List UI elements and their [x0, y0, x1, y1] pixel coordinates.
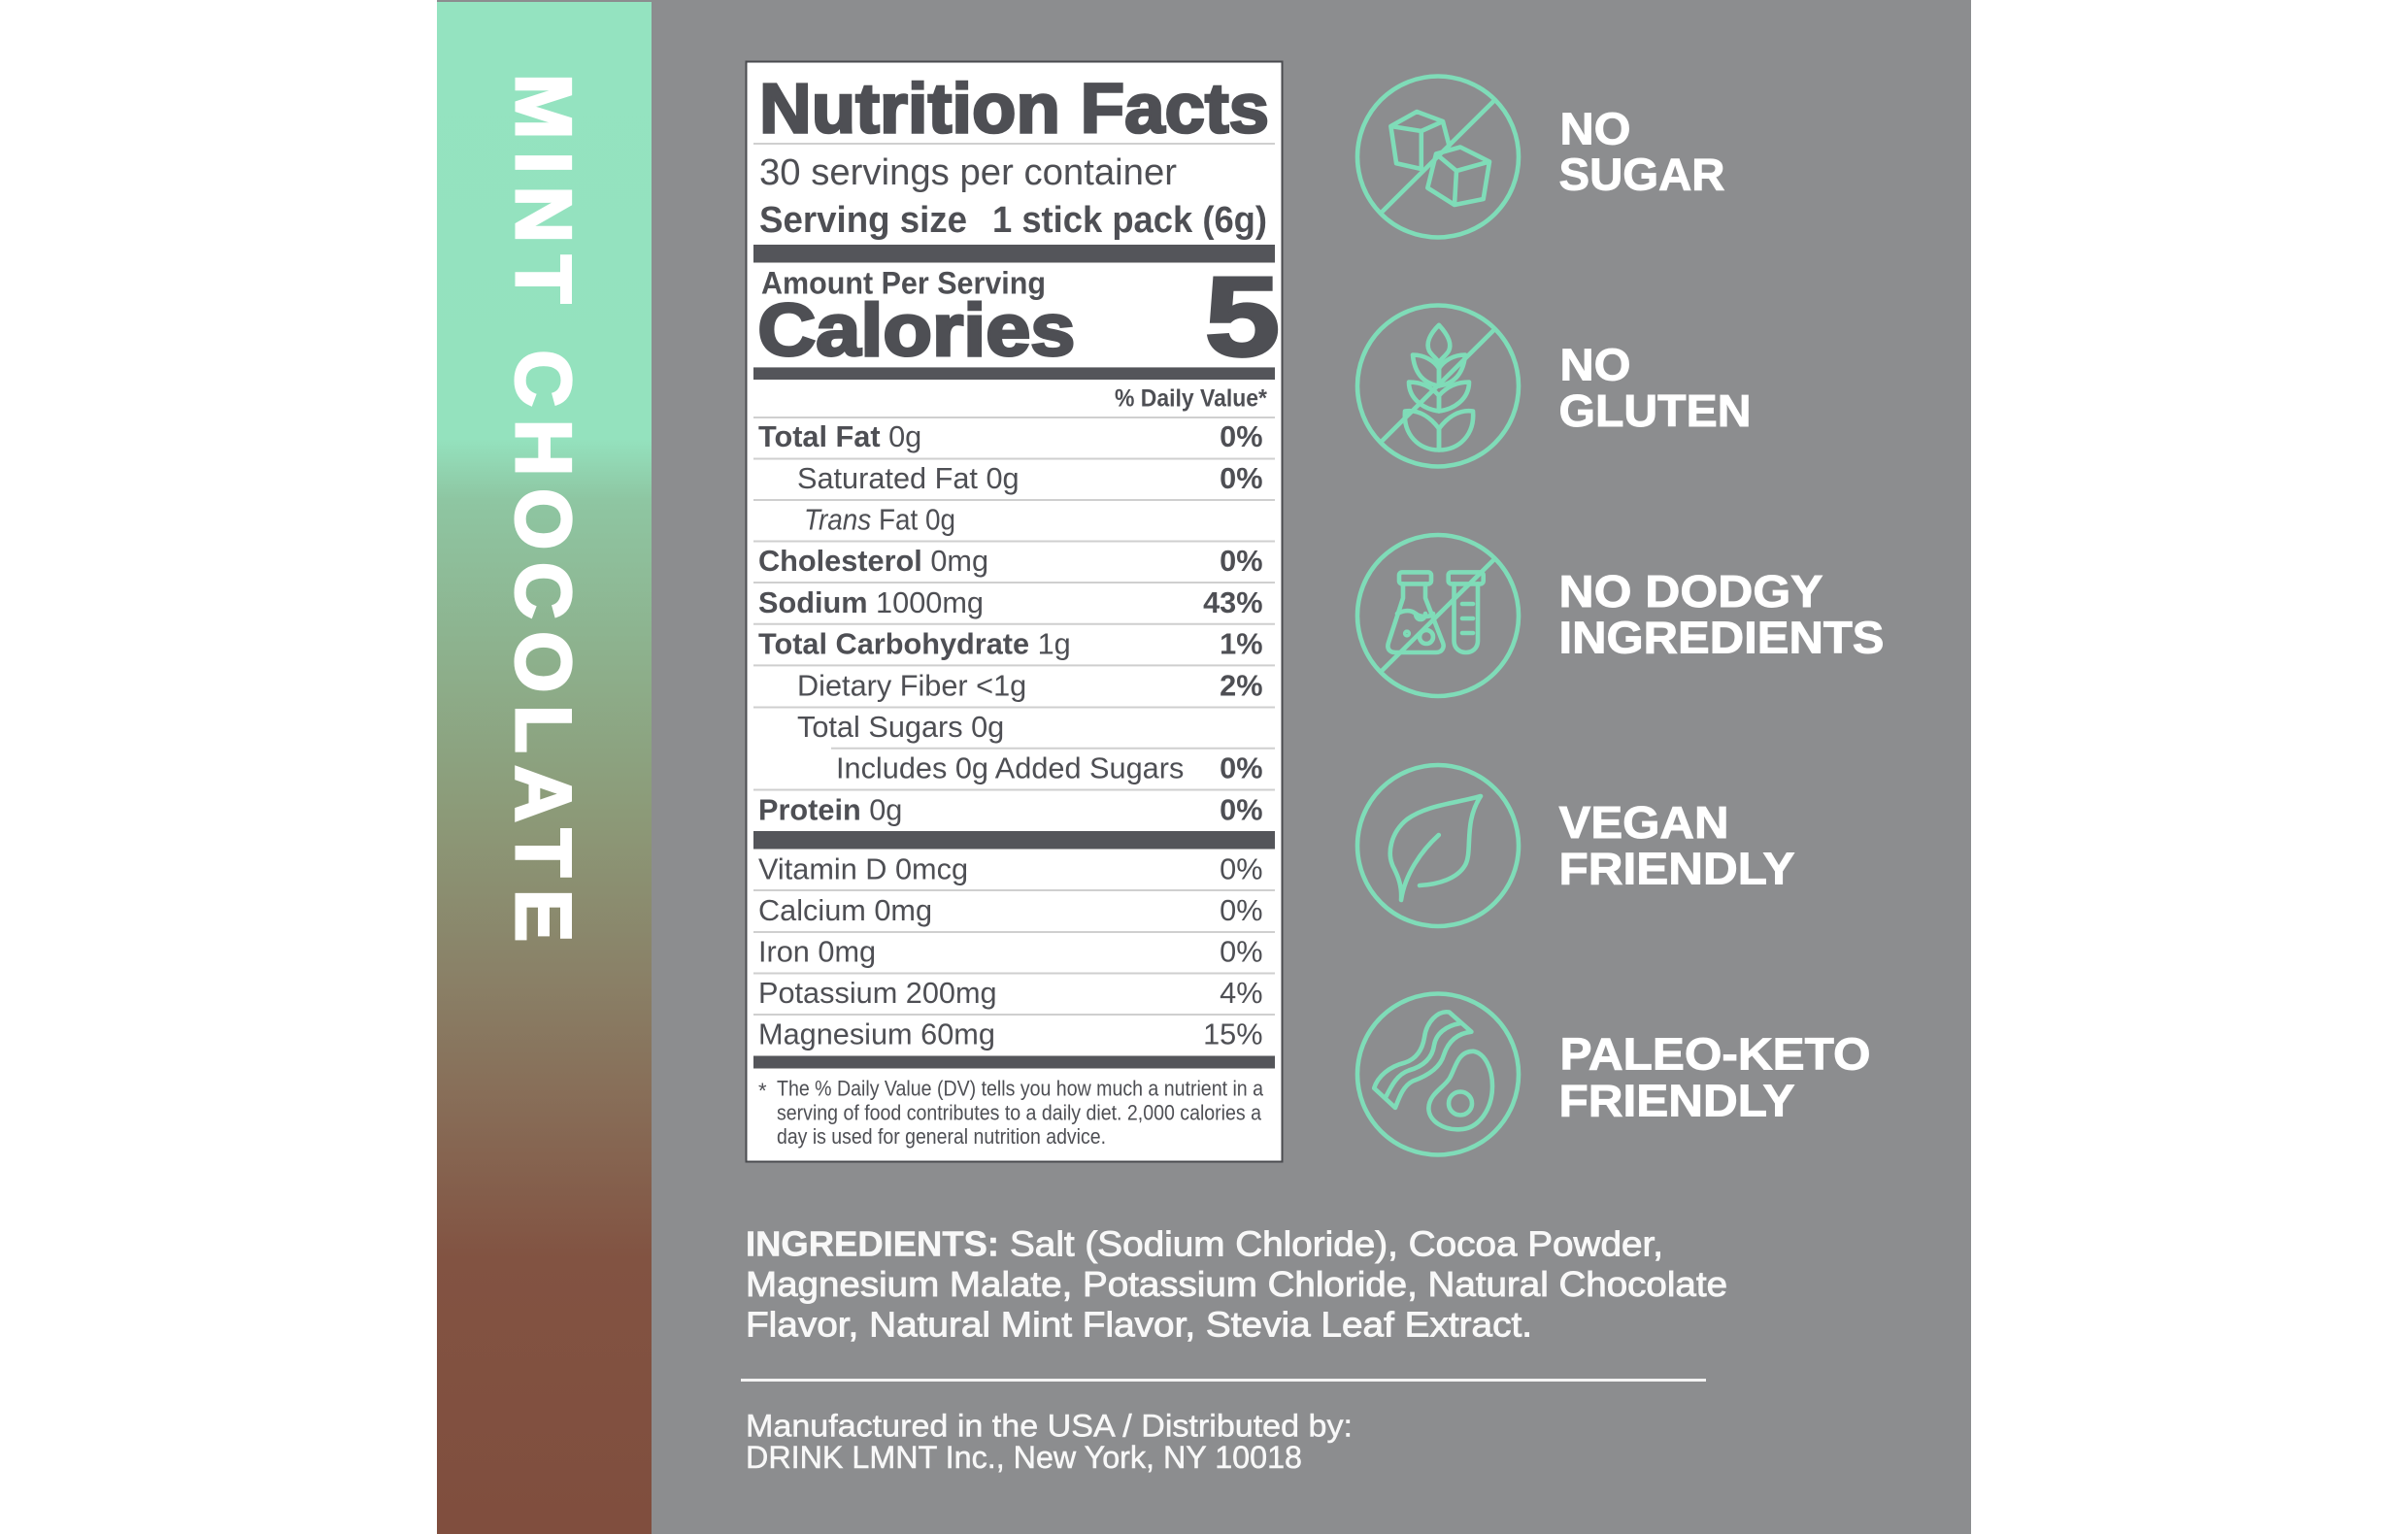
amount per serving: Amount Per Serving — [761, 266, 1046, 301]
label — [1559, 797, 1794, 894]
row: protein: 0% — [1220, 792, 1262, 826]
serving size — [759, 200, 1267, 241]
row: total carbohydrate: Total Carbohydrate 1g — [758, 627, 1071, 660]
badge: no gluten — [1357, 305, 1752, 466]
label — [1559, 566, 1884, 663]
label — [1559, 1029, 1870, 1126]
row: total fat: 0% — [1220, 419, 1262, 453]
calories label: Calories — [757, 289, 1075, 372]
row: magnesium: 15% — [1203, 1017, 1262, 1051]
row: potassium: 4% — [1220, 976, 1262, 1010]
label: SUGAR — [1559, 150, 1724, 200]
row: calcium: Calcium 0mg — [758, 893, 932, 927]
row: total fat — [758, 419, 1262, 453]
row: added sugars: Includes 0g Added Sugars — [836, 751, 1184, 785]
calories value: 5 — [1205, 253, 1280, 380]
row: vitamin d: 0% — [1220, 852, 1262, 886]
row: potassium: Potassium 200mg — [758, 976, 997, 1010]
icon: wheat crossed out — [1357, 305, 1519, 466]
badge: vegan friendly — [1357, 765, 1794, 926]
ingredients text — [746, 1224, 1727, 1345]
footnote: serving of food contributes to a daily diet. 2,000 calories a — [777, 1101, 1262, 1125]
ingredients text: INGREDIENTS: — [746, 1224, 999, 1264]
row: calcium: 0% — [1220, 893, 1262, 927]
daily value header: % Daily Value* — [1115, 384, 1267, 412]
ingredients text: Magnesium Malate, Potassium Chloride, Natural Chocolate — [746, 1264, 1727, 1304]
row: sodium: Sodium 1000mg — [758, 585, 984, 619]
row: dietary fiber — [797, 669, 1262, 703]
label: FRIENDLY — [1559, 844, 1794, 894]
label: GLUTEN — [1559, 385, 1752, 436]
flavor name: MINT CHOCOLATE — [499, 74, 586, 942]
footnote — [758, 1077, 1264, 1149]
row: vitamin d — [758, 852, 1262, 886]
label — [1559, 340, 1752, 436]
nutrition facts card — [746, 62, 1282, 1161]
serving size: Serving size — [759, 200, 967, 241]
row: protein: Protein 0g — [758, 792, 902, 826]
badge: paleo-keto friendly — [1357, 994, 1870, 1155]
footnote: The % Daily Value (DV) tells you how much a nutrient in a — [777, 1077, 1264, 1101]
row: potassium — [758, 976, 1262, 1010]
row: vitamin d: Vitamin D 0mcg — [758, 852, 968, 886]
manufacturer text: Manufactured in the USA / Distributed by: — [746, 1408, 1353, 1443]
row: cholesterol: 0% — [1220, 544, 1262, 578]
row: dietary fiber: 2% — [1220, 669, 1262, 703]
row: total carbohydrate — [758, 627, 1262, 660]
label: VEGAN — [1559, 797, 1728, 848]
row: trans fat: Trans Fat 0g — [804, 503, 955, 537]
row: cholesterol — [758, 544, 1262, 578]
row: dietary fiber: Dietary Fiber <1g — [797, 669, 1026, 703]
row: added sugars: 0% — [1220, 751, 1262, 785]
row: saturated fat — [797, 461, 1262, 495]
row: protein — [758, 792, 1262, 826]
row: total fat: Total Fat 0g — [758, 419, 921, 453]
ingredients text: Flavor, Natural Mint Flavor, Stevia Leaf Extract. — [746, 1305, 1532, 1345]
ingredients text: Salt (Sodium Chloride), Cocoa Powder, — [1010, 1224, 1663, 1264]
badge: no sugar — [1357, 76, 1724, 237]
manufacturer text — [746, 1408, 1353, 1475]
icon: flask and test tube crossed out — [1357, 535, 1519, 696]
nutrition facts title: Nutrition Facts — [759, 70, 1269, 148]
manufacturer text: DRINK LMNT Inc., New York, NY 10018 — [746, 1440, 1302, 1475]
row: calcium — [758, 893, 1262, 927]
label: NO DODGY — [1559, 566, 1823, 617]
flavor strip — [437, 2, 652, 1534]
label: NO — [1559, 103, 1631, 153]
row: iron: Iron 0mg — [758, 935, 876, 969]
servings per container: 30 servings per container — [759, 152, 1177, 193]
row: saturated fat: 0% — [1220, 461, 1262, 495]
row: total carbohydrate: 1% — [1220, 627, 1262, 660]
label: INGREDIENTS — [1559, 613, 1884, 663]
row: saturated fat: Saturated Fat 0g — [797, 461, 1020, 495]
icon: leaf — [1357, 765, 1519, 926]
footnote: day is used for general nutrition advice. — [777, 1124, 1106, 1149]
label — [1559, 103, 1724, 200]
label: FRIENDLY — [1559, 1076, 1794, 1126]
icon: sugar cubes crossed out — [1357, 76, 1519, 237]
row: magnesium — [758, 1017, 1262, 1051]
row: cholesterol: Cholesterol 0mg — [758, 544, 988, 578]
row: magnesium: Magnesium 60mg — [758, 1017, 995, 1051]
serving size: 1 stick pack (6g) — [992, 200, 1267, 241]
row: iron — [758, 935, 1262, 969]
label: NO — [1559, 340, 1631, 390]
row: iron: 0% — [1220, 935, 1262, 969]
badge: no dodgy ingredients — [1357, 535, 1884, 696]
row: sodium — [758, 585, 1262, 619]
row: sodium: 43% — [1203, 585, 1262, 619]
background panel — [437, 0, 1971, 1534]
footnote: * — [758, 1079, 767, 1103]
row: total sugars: Total Sugars 0g — [797, 710, 1004, 744]
icon: bacon and egg — [1357, 994, 1519, 1155]
nutrient rows — [753, 419, 1275, 1051]
label: PALEO-KETO — [1559, 1029, 1870, 1080]
